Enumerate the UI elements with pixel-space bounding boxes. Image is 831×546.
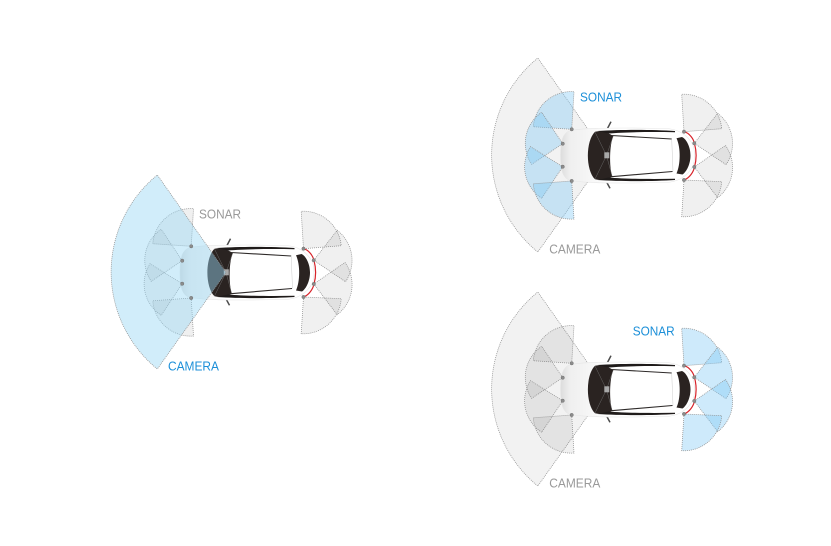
car top view xyxy=(180,239,316,305)
sonar zones front xyxy=(144,209,194,336)
label: sonar: SONAR xyxy=(199,207,241,221)
label: camera: CAMERA xyxy=(549,242,601,256)
sensors xyxy=(561,128,696,183)
sensors xyxy=(180,245,315,300)
sonar zones rear xyxy=(301,211,352,334)
sensors xyxy=(561,362,696,417)
label: sonar: SONAR xyxy=(580,90,622,104)
car top view xyxy=(560,122,696,188)
sonar zones front xyxy=(525,92,574,219)
label: camera: CAMERA xyxy=(168,360,220,374)
sonar zones rear xyxy=(682,328,733,451)
sonar zones rear xyxy=(682,94,733,217)
camera field of view xyxy=(492,58,606,252)
label: camera: CAMERA xyxy=(549,476,601,490)
label: sonar: SONAR xyxy=(633,324,675,338)
camera field of view xyxy=(492,292,606,486)
panel: camera view highlighted xyxy=(111,175,352,374)
sonar zones front xyxy=(525,326,574,453)
panel: rear sonar highlighted xyxy=(492,292,733,490)
camera field of view xyxy=(111,175,226,369)
car top view xyxy=(560,356,696,422)
panel: front sonar highlighted xyxy=(492,58,733,256)
